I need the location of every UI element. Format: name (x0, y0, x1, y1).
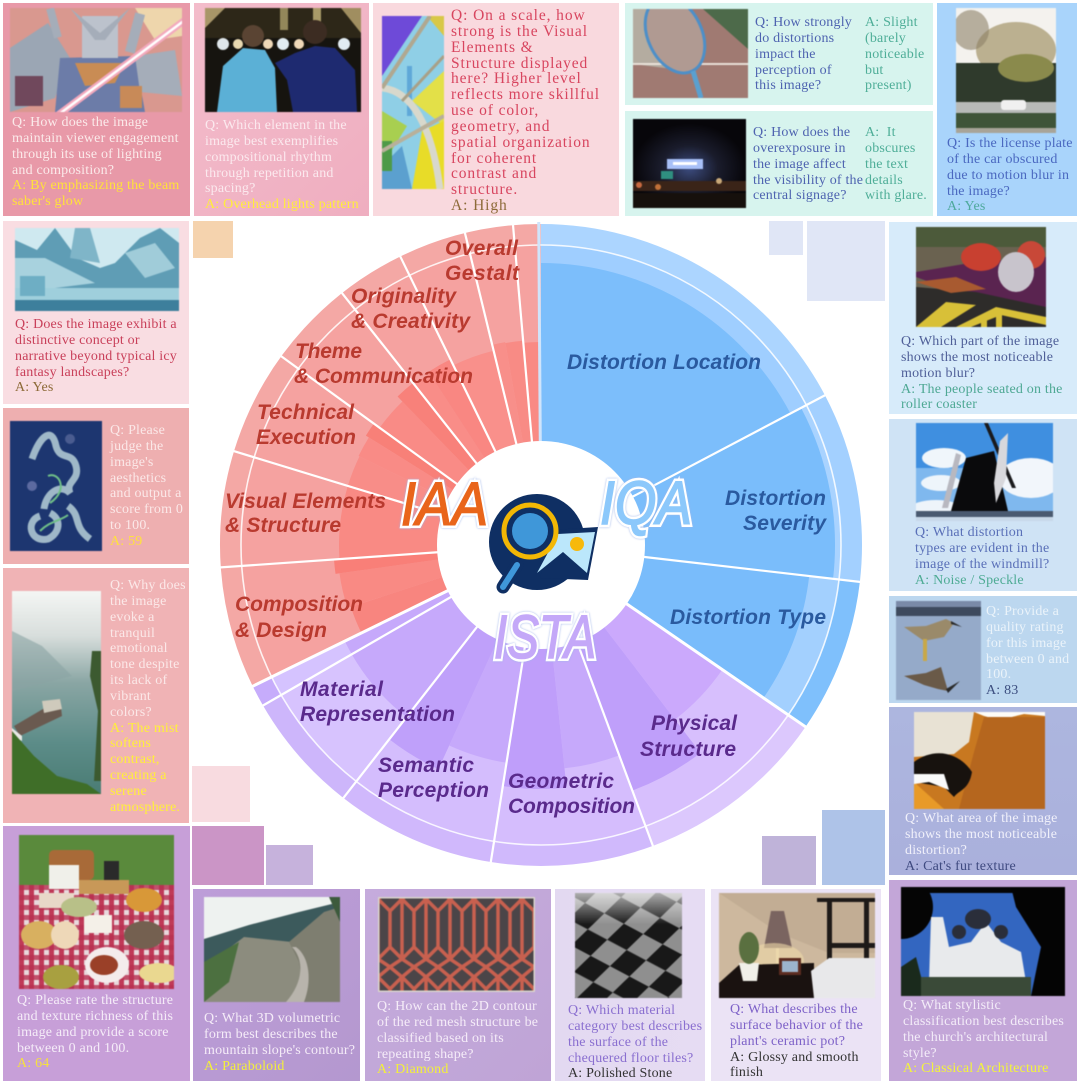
question and answer text: A: Paraboloid (204, 1059, 285, 1074)
question and answer text: contrast and (451, 165, 537, 182)
label: Distortion Type: Distortion Type (670, 606, 826, 629)
question and answer text: evoke a (110, 610, 154, 625)
question text (755, 15, 852, 93)
question and answer text (947, 136, 1073, 214)
question and answer text: tone despite (110, 657, 180, 672)
question text (753, 125, 863, 203)
decorative square: lilac (266, 845, 313, 885)
question and answer text: to 100. (110, 518, 150, 533)
question and answer text: A: Noise / Speckle (915, 573, 1024, 588)
question and answer text: 100. (986, 667, 1011, 682)
question and answer text: mountain slope's contour? (204, 1043, 355, 1058)
question and answer text: distortion? (905, 843, 967, 858)
panel: ISTA bedside lamp (711, 889, 881, 1081)
question and answer text: A: 83 (986, 683, 1018, 698)
image: trees, fence and white car (955, 8, 1057, 134)
question and answer text: Q: How does the image (12, 115, 148, 130)
image: wading bird and reflection (895, 600, 982, 700)
question and answer text: spatial organization (451, 134, 591, 151)
question and answer text: between 0 and 100. (17, 1041, 129, 1056)
question and answer text: of the red mesh structure be (377, 1015, 538, 1030)
label: Overall Gestalt: Gestalt (445, 262, 520, 285)
question and answer text: types are evident in the (915, 541, 1049, 556)
question and answer text: maintain viewer engagement (12, 131, 179, 146)
panel: ISTA picnic (3, 826, 190, 1081)
question and answer text: A: 64 (17, 1056, 49, 1071)
question and answer text: saber's glow (12, 194, 83, 209)
question and answer text: classification best describes (903, 1014, 1064, 1029)
question and answer text (901, 334, 1063, 412)
question and answer text: Q: What distortion (915, 525, 1023, 540)
image: chequered floor (574, 892, 683, 999)
question text: Q: How strongly (755, 15, 852, 30)
question and answer text: A: By emphasizing the beam (12, 178, 179, 193)
panel: ISTA church (889, 880, 1077, 1081)
panel: IQA bird reflection (889, 596, 1077, 703)
question and answer text: emotional (110, 641, 168, 656)
title: IQA: IQA (600, 469, 692, 537)
question and answer text: A: High (451, 197, 508, 214)
panel: ISTA checker tiles (555, 889, 705, 1081)
label: Technical Execution: Execution (256, 426, 356, 449)
sunburst chart (190, 220, 890, 880)
question and answer text: serene (110, 784, 147, 799)
segment group: IAA (260, 264, 822, 826)
question and answer text: and texture richness of this (17, 1009, 173, 1024)
panel: IQA night signage (625, 111, 933, 216)
question and answer text: A: Cat's fur texture (905, 859, 1016, 874)
question and answer text: Q: What describes the (730, 1002, 858, 1017)
question and answer text: A: Polished Stone (568, 1066, 672, 1081)
decorative square: orchid (192, 826, 264, 885)
answer text: A: Slight (865, 15, 918, 30)
question and answer text: the image (110, 594, 167, 609)
question and answer text: classified based on its (377, 1031, 504, 1046)
question and answer text: Q: Which part of the image (901, 334, 1059, 349)
question and answer text: quality rating (986, 620, 1064, 635)
image: mountain slope with road (203, 896, 341, 1003)
question and answer text (377, 999, 538, 1077)
panel: ISTA mountain road (193, 889, 360, 1081)
question and answer text: through repetition and (205, 166, 334, 181)
question and answer text: Q: Does the image exhibit a (15, 317, 177, 332)
question and answer text: vibrant (110, 689, 151, 704)
label: Visual Elements & Structure: & Structure (225, 514, 341, 537)
question and answer text: atmosphere. (110, 800, 180, 815)
question and answer text: compositional rhythm (205, 150, 332, 165)
question and answer text: Q: Why does (110, 578, 186, 593)
label: Overall Gestalt: Overall (445, 237, 519, 260)
decorative square: pale blue small (769, 221, 803, 255)
answer text: but (865, 63, 883, 78)
question text: this image? (755, 78, 821, 93)
question and answer text: image's (110, 455, 154, 470)
question text: the image affect (753, 157, 846, 172)
image: red diamond mesh (378, 896, 536, 992)
question and answer text: of the car obscured (947, 152, 1058, 167)
question and answer text: finish (730, 1065, 763, 1080)
panel: IQA badminton racket (625, 3, 933, 105)
question and answer text (730, 1002, 863, 1080)
question and answer text: shows the most noticeable (901, 350, 1053, 365)
question and answer text: shows the most noticeable (905, 827, 1057, 842)
question and answer text: plant's ceramic pot? (730, 1034, 845, 1049)
question and answer text (915, 525, 1049, 588)
segment group: ISTA (246, 250, 836, 840)
label: Material Representation: Representation (300, 703, 455, 726)
image: coloured glass roof with tower (381, 15, 445, 190)
image: icy fantasy landscape (14, 227, 180, 312)
decorative square: peach (193, 221, 233, 258)
answer text: present) (865, 78, 912, 93)
question and answer text: Q: Please rate the structure (17, 993, 173, 1008)
question and answer text: Q: On a scale, how (451, 7, 586, 24)
question text: impact the (755, 47, 816, 62)
label: Visual Elements & Structure: Visual Elements (225, 490, 386, 513)
question and answer text: structure. (451, 181, 518, 198)
question and answer text: roller coaster (901, 397, 977, 412)
question and answer text (110, 578, 186, 815)
image: two men facing stage lights (204, 7, 362, 113)
label: Physical Structure: Physical (651, 712, 738, 735)
question and answer text: Q: What area of the image (905, 811, 1058, 826)
question and answer text: Q: Provide a (986, 604, 1059, 619)
question and answer text: through its use of lighting (12, 147, 162, 162)
panel: IAA stained glass (373, 3, 619, 216)
question and answer text: fantasy landscapes? (15, 365, 129, 380)
question and answer text: Q: What stylistic (903, 998, 1001, 1013)
answer text (865, 15, 924, 93)
question and answer text: its lack of (110, 673, 167, 688)
image: blurred roller coaster (915, 226, 1047, 328)
question and answer text: Q: How can the 2D contour (377, 999, 537, 1014)
question and answer text (986, 604, 1069, 698)
question and answer text: Q: Is the license plate (947, 136, 1073, 151)
question and answer text (205, 118, 359, 212)
question and answer text: geometry, and (451, 118, 550, 135)
label: Theme & Communication: Theme (295, 340, 362, 363)
question and answer text: image of the windmill? (915, 557, 1049, 572)
segment group: IQA (257, 261, 825, 829)
answer text: noticeable (865, 47, 924, 62)
question and answer text: spacing? (205, 181, 256, 196)
question and answer text (204, 1011, 355, 1074)
question and answer text: Q: What 3D volumetric (204, 1011, 340, 1026)
title: IAA: IAA (401, 470, 488, 538)
question and answer text: distinctive concept or (15, 333, 140, 348)
question and answer text (568, 1003, 702, 1081)
panel: IAA misty river (3, 568, 189, 823)
image: white church with domes (900, 886, 1066, 997)
answer text (865, 125, 927, 203)
question and answer text: A: Overhead lights pattern (205, 197, 359, 212)
label: Geometric Composition: Composition (508, 795, 635, 818)
label: Geometric Composition: Geometric (508, 770, 614, 793)
question and answer text: strong is the Visual (451, 23, 588, 40)
decorative square: pale pink (192, 766, 250, 822)
question and answer text: Q: Which material (568, 1003, 675, 1018)
question and answer text: tranquil (110, 626, 155, 641)
question and answer text: and composition? (12, 163, 114, 178)
question and answer text (905, 811, 1058, 874)
decorative square: muted violet (762, 836, 816, 885)
question and answer text: the surface of the (568, 1035, 668, 1050)
label: Material Representation: Material (300, 678, 384, 701)
image: picnic spread on gingham (18, 834, 175, 990)
panel: IAA concert (194, 3, 369, 216)
question and answer text: Q: Which element in the (205, 118, 347, 133)
question and answer text: contrast, (110, 752, 160, 767)
question and answer text (903, 998, 1064, 1076)
title: IAA: IAA (401, 470, 488, 538)
question and answer text: narrative beyond typical icy (15, 349, 177, 364)
question and answer text: Elements & (451, 39, 534, 56)
panel: IQA windmill (889, 419, 1077, 591)
question and answer text: A: Classical Architecture (903, 1061, 1048, 1076)
answer text: with glare. (865, 188, 927, 203)
panel: IAA gundam (3, 3, 190, 216)
panel: ISTA red mesh (365, 889, 551, 1081)
answer text: obscures (865, 141, 916, 156)
question and answer text: Structure displayed (451, 55, 588, 72)
answer text: (barely (865, 31, 906, 46)
question text: overexposure in (753, 141, 846, 156)
question and answer text (12, 115, 180, 209)
question and answer text: image and provide a score (17, 1025, 169, 1040)
image: overexposed cat on wood floor (913, 712, 1046, 810)
image: lamp, plant and bed (718, 892, 876, 999)
question and answer text: A: Yes (947, 199, 986, 214)
image: noisy windmill against sky (915, 422, 1054, 520)
label: Composition & Design: Composition (235, 593, 363, 616)
question and answer text: judge the (110, 439, 163, 454)
question and answer text: A: The people seated on the (901, 382, 1063, 397)
question and answer text: the church's architectural (903, 1030, 1048, 1045)
question and answer text: A: Glossy and smooth (730, 1050, 859, 1065)
label: Distortion Severity: Severity (743, 512, 827, 535)
label: Originality & Creativity: Originality (351, 285, 457, 308)
question and answer text: style? (903, 1046, 937, 1061)
question and answer text: motion blur? (901, 366, 975, 381)
question and answer text: between 0 and (986, 652, 1069, 667)
label: Theme & Communication: & Communication (294, 365, 473, 388)
label: Distortion Location: Distortion Location (567, 351, 761, 374)
label: Composition & Design: & Design (235, 619, 327, 642)
label: Semantic Perception: Semantic (378, 754, 474, 777)
question and answer text: for coherent (451, 150, 537, 167)
label: Semantic Perception: Perception (378, 779, 489, 802)
panel: IQA car and trees (937, 3, 1077, 216)
question and answer text: use of color, (451, 102, 539, 119)
question and answer text: image best exemplifies (205, 134, 338, 149)
question and answer text (110, 423, 183, 549)
answer text: the text (865, 157, 908, 172)
image: gundam robot with beam saber (10, 8, 182, 113)
question and answer text: category best describes (568, 1019, 702, 1034)
question and answer text: reflects more skillful (451, 86, 600, 103)
title: IQA: IQA (600, 469, 692, 537)
question text: perception of (755, 63, 832, 78)
question and answer text: Q: Please (110, 423, 165, 438)
panel: IQA cat on floor (889, 707, 1077, 875)
question and answer text: and output a (110, 486, 182, 501)
decorative square: pale blue large (807, 221, 885, 301)
question and answer text: chequered floor tiles? (568, 1051, 693, 1066)
question and answer text (17, 993, 173, 1071)
image: boat on misty river (11, 590, 102, 795)
answer text: A: It (865, 125, 896, 140)
question and answer text: colors? (110, 705, 152, 720)
label: Technical Execution: Technical (257, 401, 355, 424)
icon: magnifier over picture (489, 494, 598, 590)
question and answer text: repeating shape? (377, 1047, 474, 1062)
question and answer text: score from 0 (110, 502, 183, 517)
answer text: details (865, 173, 903, 188)
label: Physical Structure: Structure (640, 738, 736, 761)
panel: IQA roller coaster (889, 222, 1077, 414)
question and answer text: aesthetics (110, 471, 166, 486)
question and answer text: form best describes the (204, 1027, 338, 1042)
label: Distortion Severity: Distortion (725, 487, 826, 510)
image: overexposed night street (632, 118, 747, 209)
question and answer text (15, 317, 177, 395)
decorative square: periwinkle (822, 810, 885, 885)
question and answer text: creating a (110, 768, 167, 783)
image: iridescent bubbles on navy (9, 420, 103, 552)
question and answer text: A: Diamond (377, 1062, 449, 1077)
question and answer text: softens (110, 736, 151, 751)
question and answer text (451, 7, 600, 214)
image: racket on court (632, 8, 749, 99)
question and answer text: the image? (947, 184, 1010, 199)
question text: do distortions (755, 31, 834, 46)
panel: IAA ice landscape (3, 221, 189, 404)
question and answer text: A: The mist (110, 721, 179, 736)
question text: the visibility of the (753, 173, 863, 188)
question and answer text: here? Higher level (451, 70, 582, 87)
question text: central signage? (753, 188, 847, 203)
panel: IAA bubbles (3, 408, 189, 564)
question and answer text: for this image (986, 636, 1066, 651)
question text: Q: How does the (753, 125, 850, 140)
label: Originality & Creativity: & Creativity (351, 310, 471, 333)
question and answer text: due to motion blur in (947, 168, 1069, 183)
question and answer text: A: 59 (110, 534, 142, 549)
question and answer text: A: Yes (15, 380, 54, 395)
question and answer text: surface behavior of the (730, 1018, 863, 1033)
title: ISTA: ISTA (494, 603, 596, 671)
title: ISTA: ISTA (494, 603, 596, 671)
